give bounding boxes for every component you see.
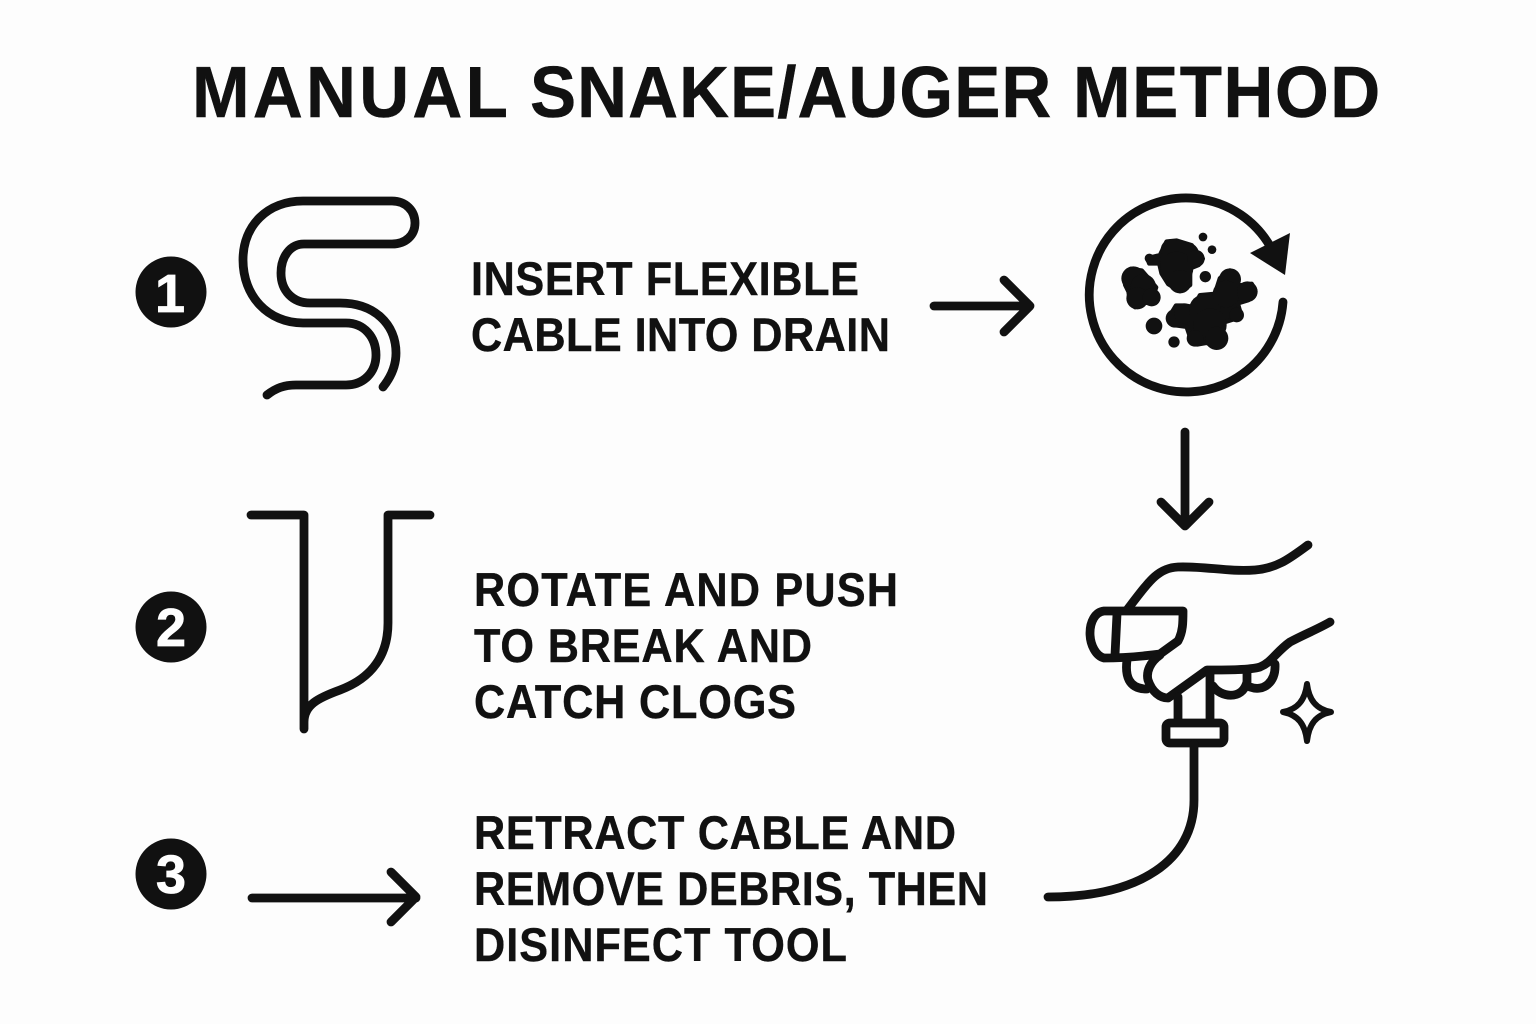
title: MANUAL xyxy=(192,52,508,132)
curled fingers xyxy=(1126,660,1275,695)
icon: rotating circle with clog xyxy=(1089,198,1290,392)
step 1 text: CABLE INTO DRAIN xyxy=(471,308,890,361)
step 1 badge: 1 xyxy=(155,264,185,324)
title: SNAKE/AUGER xyxy=(530,52,1051,132)
icon: flexible cable xyxy=(243,201,415,395)
arrow: step 3 xyxy=(252,872,416,922)
title xyxy=(192,52,1380,132)
icon: hand gripping auger handle xyxy=(1048,545,1330,897)
step 2 badge xyxy=(136,592,206,662)
step 3 text: DISINFECT TOOL xyxy=(474,918,847,971)
handle stem xyxy=(1178,672,1210,722)
right blob xyxy=(1166,268,1258,350)
step 3 badge xyxy=(136,838,206,910)
step 1 text xyxy=(471,252,890,361)
step 1 badge xyxy=(136,256,206,328)
step 2 text: CATCH CLOGS xyxy=(474,675,796,728)
clog debris xyxy=(1121,233,1258,350)
back of hand xyxy=(1127,545,1308,610)
handle collar xyxy=(1166,723,1224,743)
thumb xyxy=(1090,611,1183,658)
arrow: step 1 to clog xyxy=(934,280,1030,332)
rotation ring xyxy=(1089,198,1283,392)
step 2 text: ROTATE AND PUSH xyxy=(474,563,898,616)
step 2 badge: 2 xyxy=(156,598,186,658)
step 2 text: TO BREAK AND xyxy=(474,619,812,672)
arrow: clog to hand xyxy=(1161,432,1209,526)
step 3 badge: 3 xyxy=(156,845,186,905)
step 2 text xyxy=(474,563,898,728)
cable xyxy=(1048,744,1194,897)
step 1 text: INSERT FLEXIBLE xyxy=(471,252,859,305)
step 3 text xyxy=(474,806,988,971)
rotation arrowhead xyxy=(1250,233,1290,275)
palm and wrist xyxy=(1148,622,1330,698)
step 3 text: RETRACT CABLE AND xyxy=(474,806,956,859)
icon: drain pipe xyxy=(251,515,430,729)
top blob xyxy=(1145,239,1205,293)
title: METHOD xyxy=(1073,52,1380,132)
left blob xyxy=(1121,266,1161,309)
debris dots xyxy=(1146,233,1216,348)
step 3 text: REMOVE DEBRIS, THEN xyxy=(474,862,988,915)
icon: sparkle xyxy=(1283,684,1331,741)
